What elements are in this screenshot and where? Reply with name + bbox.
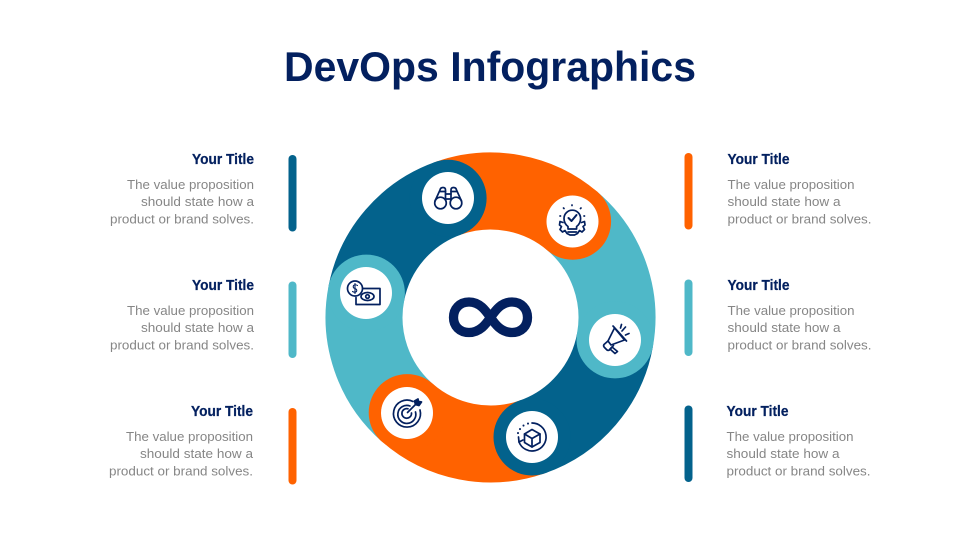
segment head: lightbulb xyxy=(534,183,611,260)
panel: left top text: product or brand solves. xyxy=(110,212,254,226)
icon: infinity xyxy=(454,302,528,332)
panel: left bottom text: should state how a xyxy=(140,447,253,461)
panel: left top text: The value proposition xyxy=(127,178,254,192)
panel: left middle text xyxy=(110,278,254,352)
ring segment: top orange xyxy=(448,191,573,221)
panel: right top text: The value proposition xyxy=(728,178,854,192)
panel: right middle text: product or brand solves. xyxy=(728,338,872,352)
bar: right bottom xyxy=(684,406,692,482)
ring segment: lower right blue xyxy=(532,340,615,437)
ring segment: right teal xyxy=(573,221,617,340)
panel: right top text: Your Title xyxy=(728,152,790,168)
bar: left middle xyxy=(288,282,296,358)
segment head: target xyxy=(369,374,446,451)
panel: right bottom text: product or brand solves. xyxy=(726,464,870,478)
panel: left top text: Your Title xyxy=(192,152,254,168)
title: DevOps Infographics xyxy=(284,43,696,90)
ring diagram xyxy=(328,160,654,476)
bar: left top xyxy=(288,155,296,232)
icon: money bill and coin xyxy=(340,267,392,319)
segment head: box xyxy=(494,398,570,476)
panel: right top text: product or brand solves. xyxy=(728,212,872,226)
icon: box in rotating arrows xyxy=(506,411,558,463)
panel: left bottom text: The value proposition xyxy=(126,430,253,444)
ring segment: bottom orange xyxy=(407,413,532,444)
panel: right bottom text: should state how a xyxy=(726,447,840,461)
panel: left middle text: The value proposition xyxy=(127,304,254,318)
panel: left bottom text xyxy=(109,404,253,478)
panel: right middle text: Your Title xyxy=(728,278,790,294)
panel: right top text: should state how a xyxy=(728,195,840,209)
panel: left top text: should state how a xyxy=(141,195,254,209)
icon: binoculars xyxy=(422,172,474,224)
icon: lightbulb gear xyxy=(546,196,598,248)
icon: target with arrow xyxy=(381,387,433,439)
panel: right bottom text: Your Title xyxy=(726,404,788,420)
segment head: money xyxy=(328,255,405,332)
icon: megaphone xyxy=(589,314,641,366)
panel: right middle text: should state how a xyxy=(728,321,840,335)
panel: right top text xyxy=(728,152,872,226)
segment head: megaphone xyxy=(576,301,654,378)
panel: left middle text: should state how a xyxy=(141,321,254,335)
segment head: binoculars xyxy=(410,160,487,237)
panel: left middle text: product or brand solves. xyxy=(110,338,254,352)
panel: right middle text xyxy=(728,278,872,352)
bar: left bottom xyxy=(288,408,296,484)
ring segment: upper left blue xyxy=(366,198,448,293)
panel: left bottom text: Your Title xyxy=(191,404,253,420)
panel: right bottom text: The value proposition xyxy=(726,430,854,444)
ring segment: left teal xyxy=(364,293,407,413)
bar: right top xyxy=(684,153,692,230)
panel: left top text xyxy=(110,152,254,226)
panel: right middle text: The value proposition xyxy=(728,304,854,318)
panel: right bottom text xyxy=(726,404,870,478)
panel: left bottom text: product or brand solves. xyxy=(109,464,253,478)
bar: right middle xyxy=(684,280,692,356)
panel: left middle text: Your Title xyxy=(192,278,254,294)
